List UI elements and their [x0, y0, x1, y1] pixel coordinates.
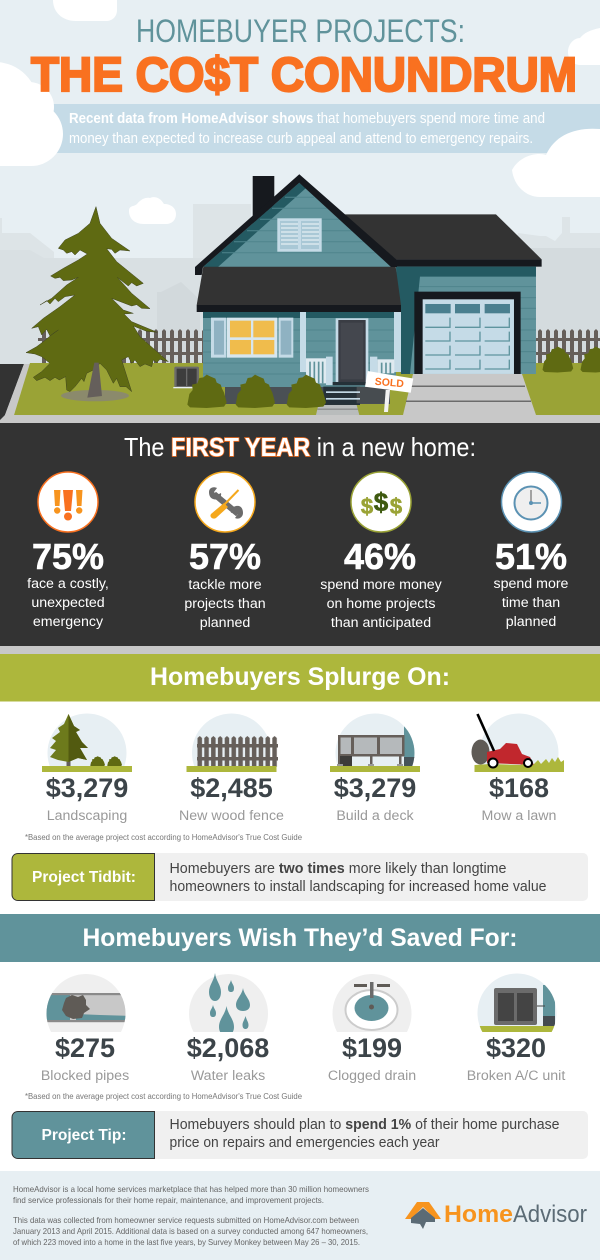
- gable window: [277, 218, 322, 252]
- stat 46%: [320, 536, 443, 631]
- heading: saved for: [0, 914, 600, 962]
- intro text: [69, 111, 545, 147]
- heading: splurge: [0, 654, 600, 702]
- cost: clogged drain: [328, 1033, 416, 1084]
- callout: project tidbit: Homebuyers are two times more likely than longtime: [170, 860, 506, 877]
- cloud: upper right: [568, 28, 600, 65]
- cost: broken a/c unit: Broken A/C unit: [467, 1068, 565, 1084]
- icon: fence: [186, 714, 278, 772]
- cost: landscaping: Landscaping: [47, 808, 127, 824]
- cost: broken a/c unit: [467, 1033, 565, 1084]
- stat 75%: face a costly,: [27, 576, 109, 592]
- logo: HomeAdvisor: Advisor: [513, 1201, 587, 1228]
- garage: [343, 214, 542, 374]
- title: [31, 13, 577, 102]
- cost: clogged drain: $199: [342, 1033, 402, 1063]
- footer panel: [0, 1171, 600, 1260]
- shrubs: [187, 347, 600, 408]
- footnote: *Based on the average project cost according to HomeAdvisor's True Cost Guide: [25, 833, 303, 842]
- cost: blocked pipes: Blocked pipes: [41, 1068, 129, 1084]
- logo: HomeAdvisor: Home: [444, 1201, 513, 1228]
- icon: deck: [330, 714, 420, 772]
- icon: dollar signs: [351, 472, 411, 532]
- icon: landscaping: [42, 714, 132, 772]
- driveway: [403, 374, 536, 415]
- icon: dollar signs: $: [390, 494, 402, 519]
- cost: water leaks: [187, 1033, 269, 1084]
- footer text: This data was collected from homeowner service requests submitted on HomeAdvisor.com between: [13, 1215, 359, 1225]
- foundation: [225, 387, 390, 404]
- footer text: of which 223 moved into a home in the last five years, by Survey Monkey between May 26 – 30, 2015.: [13, 1237, 360, 1247]
- cost: clogged drain: Clogged drain: [328, 1068, 416, 1084]
- stat 57%: projects than: [184, 596, 266, 612]
- callout: project tidbit: Project Tidbit:: [32, 869, 136, 886]
- sky background: [0, 0, 600, 423]
- cost: new wood fence: $2,485: [190, 773, 273, 803]
- stat 51%: time than: [502, 595, 560, 611]
- main lower roof: [197, 267, 401, 305]
- footer text: January 2013 and April 2015. Additional data is based on a survey conducted among 647 homeowners,: [13, 1226, 368, 1236]
- cloud: top centre: [53, 0, 117, 21]
- icon: lawn mower: [472, 714, 564, 772]
- intro band: [50, 104, 600, 153]
- first year heading: The FIRST YEAR in a new home:: [124, 432, 476, 462]
- intro text: Recent data from HomeAdvisor shows that homebuyers spend more time and: [69, 111, 545, 127]
- cost: blocked pipes: [41, 1033, 129, 1084]
- lower wall: [203, 312, 396, 387]
- cost: build a deck: [334, 773, 416, 824]
- cost: water leaks: Water leaks: [191, 1068, 265, 1084]
- footer text: find service professionals for their home repair, maintenance, and improvement projects.: [13, 1195, 324, 1205]
- sold sign: [365, 371, 413, 412]
- garage door: [414, 292, 521, 374]
- cloud: mid: [129, 197, 176, 224]
- icon: water leaks: [189, 973, 268, 1032]
- gable wall: [203, 183, 395, 267]
- cost: new wood fence: [179, 773, 284, 824]
- stat 75%: unexpected: [31, 595, 105, 611]
- cost: mow a lawn: [482, 773, 556, 824]
- pine tree: [26, 207, 168, 401]
- callout: project tidbit: homeowners to install landscaping for increased home value: [170, 878, 546, 895]
- A/C unit by house: [173, 367, 199, 388]
- stat 46%: than anticipated: [331, 615, 431, 631]
- cost: mow a lawn: $168: [489, 773, 549, 803]
- porch pillars: [300, 312, 306, 372]
- callout: project tip: Project Tip:: [42, 1127, 126, 1144]
- stat 51%: [494, 536, 569, 630]
- cost: blocked pipes: $275: [55, 1033, 115, 1063]
- sold sign: SOLD: [374, 376, 405, 390]
- stat 51%: planned: [506, 614, 556, 630]
- title line 2: THE CO$T CONUNDRUM: [31, 49, 577, 102]
- icon: broken a/c: [478, 974, 556, 1032]
- front door and porch: [306, 318, 394, 415]
- skyline silhouettes: [0, 204, 600, 364]
- cost: mow a lawn: Mow a lawn: [482, 808, 556, 824]
- stat 46%: 46%: [344, 536, 416, 577]
- callout: project tip: [12, 1111, 588, 1159]
- panel: first year: [0, 423, 600, 646]
- callout: project tip: Homebuyers should plan to spend 1% of their home purchase: [170, 1116, 560, 1133]
- icon: dollar signs: $: [361, 494, 373, 519]
- stat 75%: emergency: [33, 614, 104, 630]
- heading: splurge: Homebuyers Splurge On:: [150, 663, 450, 691]
- footnote: *Based on the average project cost according to HomeAdvisor's True Cost Guide: [25, 1092, 303, 1101]
- icon: blocked pipes: [46, 974, 126, 1032]
- cost: new wood fence: New wood fence: [179, 808, 284, 824]
- icon: tools: [195, 472, 255, 532]
- front window: [211, 318, 293, 358]
- lawn: [14, 363, 600, 415]
- stat 46%: spend more money: [320, 577, 443, 593]
- heading: saved for: Homebuyers Wish They’d Saved For:: [82, 924, 518, 952]
- callout: project tidbit: [12, 853, 588, 901]
- stat 46%: on home projects: [327, 596, 435, 612]
- icon: exclamation marks: [38, 472, 98, 532]
- stat 51%: 51%: [495, 536, 567, 577]
- cost: build a deck: Build a deck: [336, 808, 415, 824]
- footer text: HomeAdvisor is a local home services marketplace that has helped more than 30 million homeowners: [13, 1184, 369, 1194]
- stat 57%: tackle more: [188, 577, 262, 593]
- divider band: [0, 646, 600, 654]
- logo: HomeAdvisor: [405, 1201, 587, 1229]
- icon: dollar signs: $: [374, 487, 389, 517]
- cost: build a deck: $3,279: [334, 773, 416, 803]
- stat 57%: planned: [200, 615, 250, 631]
- chimney: [253, 176, 274, 224]
- stat 51%: spend more: [494, 576, 569, 592]
- stat 75%: 75%: [32, 536, 104, 577]
- main roof outline: [195, 174, 397, 275]
- intro text: money than expected to increase curb appeal and attend to emergency repairs.: [69, 131, 533, 147]
- cost: landscaping: $3,279: [46, 773, 128, 803]
- road: [0, 364, 24, 420]
- icon: clock: [502, 472, 562, 532]
- house: [195, 174, 542, 415]
- fence: right: [536, 329, 600, 363]
- callout: project tip: price on repairs and emergencies each year: [170, 1134, 440, 1151]
- stat 57%: [184, 536, 266, 631]
- cost: broken a/c unit: $320: [486, 1033, 546, 1063]
- footer text: [13, 1184, 369, 1247]
- stat 57%: 57%: [189, 536, 261, 577]
- curb and sidewalk: [0, 364, 600, 423]
- fence: left: [38, 329, 204, 363]
- stat 75%: [27, 536, 109, 630]
- cloud: lower right: [512, 129, 600, 197]
- cloud: left: [0, 62, 63, 166]
- cost: landscaping: [46, 773, 128, 824]
- icon: clogged drain: [332, 974, 412, 1032]
- cost: water leaks: $2,068: [187, 1033, 269, 1063]
- title line 1: HOMEBUYER PROJECTS:: [136, 13, 465, 49]
